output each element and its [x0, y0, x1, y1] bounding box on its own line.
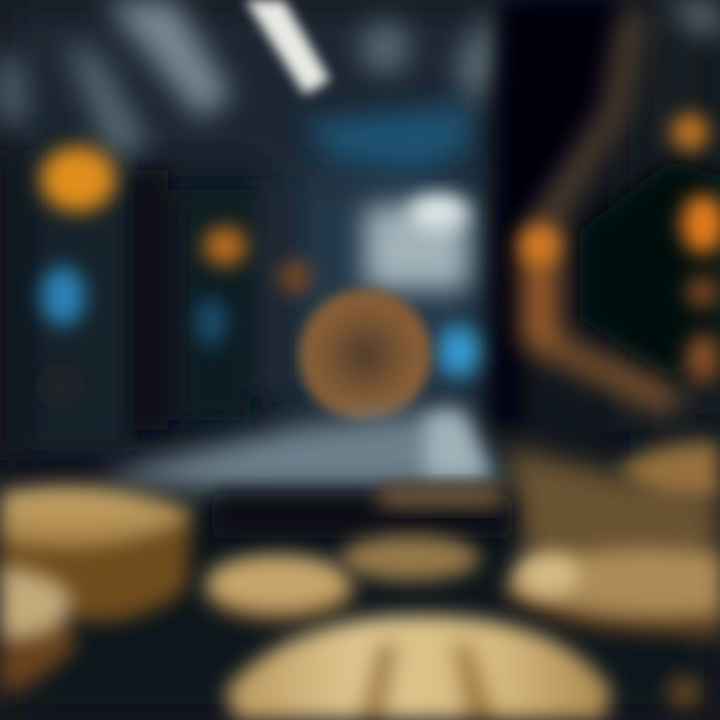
orange indicator lights: left [40, 146, 310, 398]
dark torso base [212, 494, 512, 538]
ceiling light streaks [0, 0, 720, 160]
coin: right back [618, 442, 720, 499]
coin highlight [516, 552, 580, 596]
orange indicator lights: right [520, 113, 720, 383]
blue indicator lights [41, 266, 480, 377]
coin: right large [505, 549, 720, 635]
coin: center left [204, 554, 356, 624]
window highlight [408, 194, 468, 230]
dark right column [490, 0, 720, 430]
wooden table right [505, 445, 720, 640]
blue ceiling panel [300, 104, 470, 172]
small coin corner [667, 675, 701, 709]
coin: far left [0, 565, 76, 695]
brown coin behind torso [378, 484, 503, 508]
bright ceiling light [245, 0, 330, 95]
orange hexagon frame [540, 20, 665, 400]
figure shirt [95, 408, 500, 490]
coin: left stack [0, 485, 195, 622]
coin: center [340, 535, 480, 581]
figure head [299, 289, 431, 421]
shirt highlight [425, 410, 490, 478]
coin: bottom foreground [225, 615, 612, 720]
left server racks [0, 130, 292, 460]
bright window [364, 205, 470, 290]
